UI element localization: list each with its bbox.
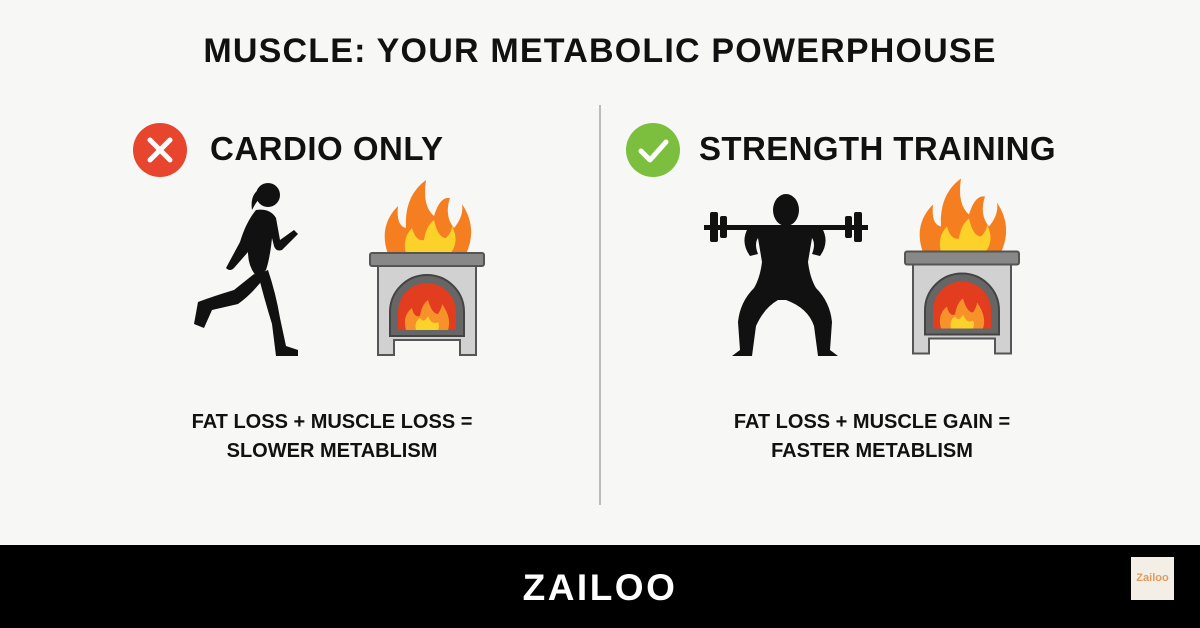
caption — [734, 411, 1010, 462]
caption: FAT LOSS + MUSCLE LOSS = — [192, 411, 472, 433]
caption: SLOWER METABLISM — [227, 440, 437, 462]
heading: strength training: STRENGTH TRAINING — [699, 130, 1056, 167]
footer — [0, 545, 1200, 628]
caption: FAT LOSS + MUSCLE GAIN = — [734, 411, 1010, 433]
caption: FASTER METABLISM — [771, 440, 973, 462]
icon: green check — [626, 123, 680, 177]
panel: strength — [626, 123, 1056, 462]
logo — [1131, 557, 1174, 600]
icon: furnace left — [369, 180, 485, 356]
icon: furnace right — [904, 178, 1020, 354]
heading: cardio only: CARDIO ONLY — [210, 130, 443, 167]
title: MUSCLE: YOUR METABOLIC POWERPHOUSE — [203, 32, 997, 70]
icon: squatter — [704, 194, 868, 356]
panel: cardio — [133, 123, 472, 462]
icon: runner — [194, 183, 298, 356]
logo: Zailoo — [1136, 572, 1169, 584]
brand name: ZAILOO — [523, 567, 677, 608]
icon: red x — [133, 123, 187, 177]
caption — [192, 411, 472, 462]
divider — [599, 105, 601, 505]
